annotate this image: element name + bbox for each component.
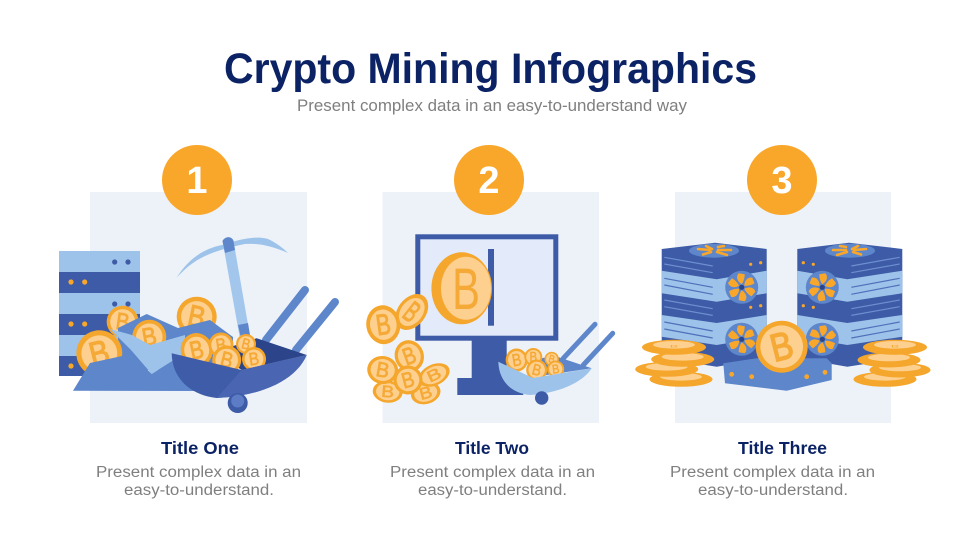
- coins behind the mound: [105, 293, 220, 340]
- top fan: [689, 244, 739, 258]
- number badge 1: 1: [186, 160, 208, 202]
- icon: large bitcoin on screen: [431, 252, 492, 324]
- icon: server rack: [59, 251, 140, 376]
- barrow handles: [266, 290, 335, 350]
- text: description three: Present complex data in an: [670, 464, 875, 481]
- coins in barrow: B: [218, 348, 235, 374]
- icon: scattered coins: B: [374, 309, 393, 342]
- coins behind the mound: B: [114, 307, 131, 336]
- text: description one: [96, 464, 301, 499]
- icon: small wheelbarrow: [498, 324, 613, 405]
- text: description one: easy-to-understand.: [124, 482, 274, 499]
- text: description three: easy-to-understand.: [698, 482, 848, 499]
- number badge 2: 2: [478, 160, 500, 202]
- icon: scattered coins: B: [417, 382, 434, 404]
- barrow interior: [215, 338, 307, 370]
- icon: central bitcoin: B: [766, 322, 798, 370]
- light mound: [110, 329, 185, 374]
- fan upper: [725, 271, 758, 304]
- icon: scattered coins: [364, 288, 453, 408]
- panel: step three: [635, 145, 930, 499]
- coin on the mound: B: [140, 323, 159, 353]
- icon: wheelbarrow: [172, 290, 335, 413]
- icon: small wheelbarrow: B: [529, 350, 537, 365]
- icon: small wheelbarrow: B: [551, 361, 560, 377]
- heading: title two: Title Two: [455, 438, 529, 458]
- text: description two: easy-to-understand.: [418, 482, 567, 499]
- heading: title one: Title One: [161, 438, 239, 458]
- icon: scattered coins: B: [399, 341, 420, 371]
- icon: scattered coins: B: [424, 364, 444, 386]
- icon: right coin stack: B: [891, 344, 899, 348]
- panel: step two: [364, 145, 613, 499]
- icon: small wheelbarrow: B: [511, 351, 523, 371]
- icon: central platform: [723, 358, 832, 391]
- icon: small wheelbarrow: B: [547, 353, 556, 366]
- icon: left mining server: [662, 243, 767, 367]
- coins behind the mound: B: [185, 298, 209, 335]
- fan lower: [725, 323, 758, 356]
- icon: computer monitor: [418, 237, 556, 395]
- icon: left coin stack: [635, 340, 714, 387]
- coins in barrow: B: [187, 334, 206, 365]
- icon: right mining server: [797, 243, 902, 367]
- number badge 3: 3: [771, 160, 793, 202]
- text: description two: [390, 464, 595, 499]
- icon: central bitcoin: [750, 315, 813, 378]
- panel: step one: [59, 145, 335, 499]
- icon: large bitcoin on screen: B: [452, 256, 480, 322]
- title: Crypto Mining Infographics: [224, 45, 757, 93]
- coins in barrow: B: [240, 334, 252, 353]
- panel background: [382, 192, 599, 423]
- text: description three: [670, 464, 875, 499]
- text: description one: Present complex data in an: [96, 464, 301, 481]
- number badge 1: [162, 145, 232, 215]
- icon: small wheelbarrow: B: [530, 361, 543, 380]
- number badge 3: [747, 145, 817, 215]
- large coin: [71, 325, 127, 381]
- fan lower: [806, 323, 839, 356]
- barrow wheel: [228, 393, 248, 413]
- panel background: [675, 192, 891, 423]
- coins in barrow: B: [248, 348, 260, 370]
- icon: scattered coins: B: [374, 359, 391, 383]
- subtitle: Present complex data in an easy-to-understand way: [297, 97, 688, 115]
- icon: scattered coins: B: [396, 296, 426, 329]
- icon: right coin stack: [854, 340, 930, 387]
- barrow bowl: [172, 353, 307, 398]
- front mound: [73, 353, 215, 391]
- coin on the mound: [130, 317, 169, 356]
- text: description two: Present complex data in an: [390, 464, 595, 481]
- rear mound: [118, 314, 233, 370]
- number badge 2: [454, 145, 524, 215]
- icon: pickaxe: [177, 237, 288, 339]
- panel background: [90, 192, 307, 423]
- coins in barrow: [178, 330, 268, 378]
- icon: scattered coins: B: [399, 368, 417, 394]
- coins in barrow: B: [214, 333, 228, 356]
- fan upper: [806, 271, 839, 304]
- icon: left coin stack: B: [670, 344, 678, 348]
- heading: title three: Title Three: [738, 438, 827, 458]
- top fan: [825, 244, 875, 258]
- icon: scattered coins: B: [381, 382, 395, 401]
- large coin: B: [85, 332, 113, 374]
